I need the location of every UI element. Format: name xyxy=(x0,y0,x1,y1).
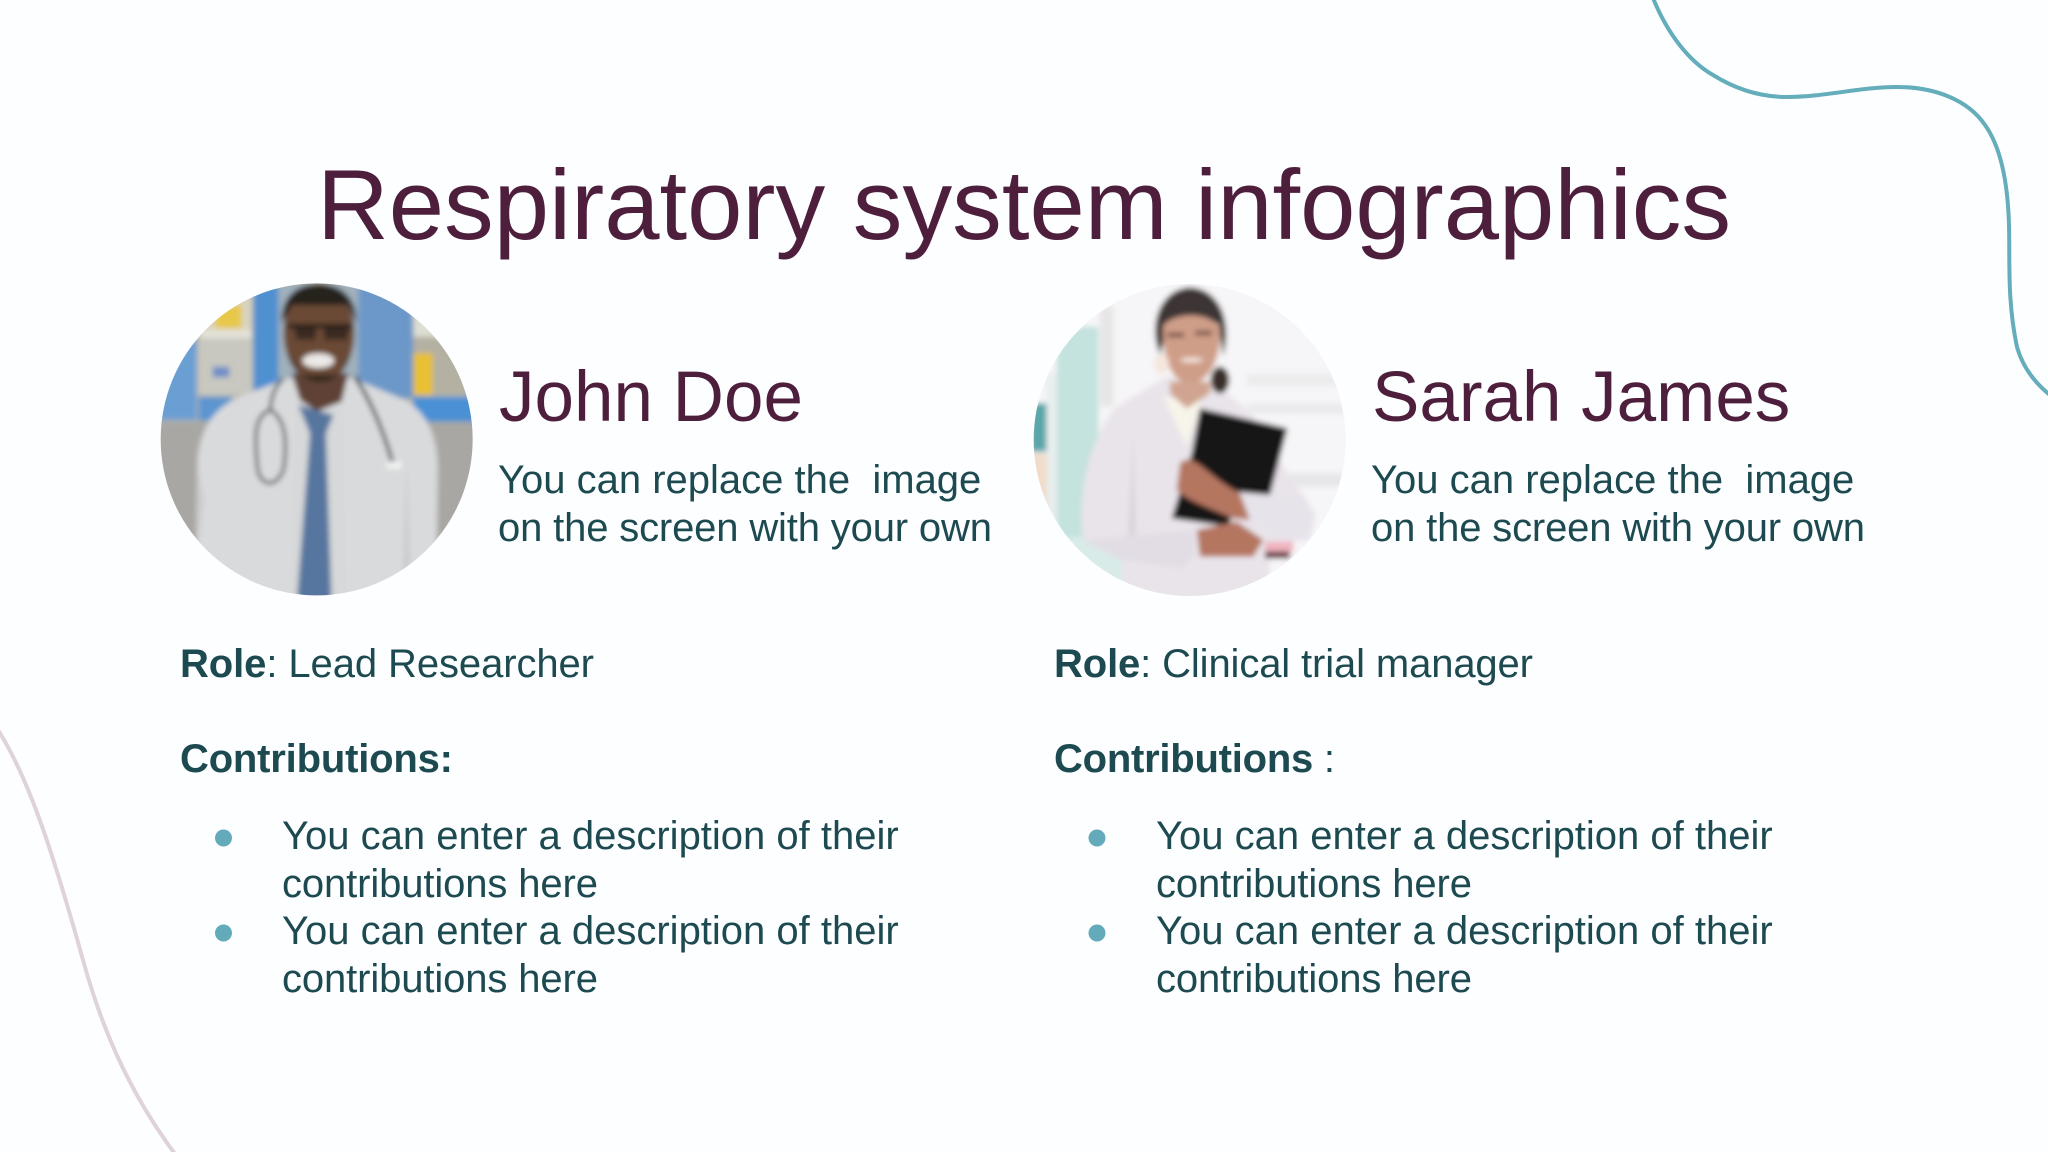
coat xyxy=(197,378,438,607)
contributions list: contributions here xyxy=(1156,957,1472,1001)
tie xyxy=(297,405,333,603)
contributions list: contributions here xyxy=(282,957,598,1001)
hair xyxy=(1155,287,1226,357)
contributions list: You can enter a description of their xyxy=(282,814,899,858)
contributions list: contributions here xyxy=(282,862,598,906)
neck xyxy=(292,373,348,412)
shirt xyxy=(290,403,347,607)
hands and arms xyxy=(1177,460,1250,520)
description: on the screen with your own xyxy=(1371,506,1865,550)
contributions list: You can enter a description of their xyxy=(1156,814,1773,858)
decorative curve: top right xyxy=(1653,0,2048,395)
contributions list xyxy=(1088,814,1773,1001)
name: Sarah James xyxy=(1372,358,1790,437)
contributions list: You can enter a description of their xyxy=(1156,909,1773,953)
role: Role: Clinical trial manager xyxy=(1054,642,1533,686)
stethoscope xyxy=(256,378,285,483)
panel: Sarah James xyxy=(1027,277,1865,1001)
contributions list xyxy=(215,814,899,1001)
contributions list: You can enter a description of their xyxy=(282,909,899,953)
description: You can replace the image xyxy=(498,458,981,502)
decorative curve: bottom left xyxy=(0,730,175,1152)
description xyxy=(498,458,992,550)
role: Role: Lead Researcher xyxy=(180,642,594,686)
description xyxy=(1371,458,1865,550)
panel: John Doe xyxy=(150,270,992,1001)
contributions heading: Contributions : xyxy=(1054,737,1335,781)
coat xyxy=(1080,378,1300,596)
title: Respiratory system infographics xyxy=(317,150,1731,261)
photo: Sarah James xyxy=(1034,284,1346,596)
contributions list: contributions here xyxy=(1156,862,1472,906)
clipboard xyxy=(1172,408,1287,527)
description: You can replace the image xyxy=(1371,458,1854,502)
face xyxy=(1163,315,1220,383)
photo: John Doe xyxy=(160,283,473,596)
contributions heading: Contributions: xyxy=(180,737,453,781)
head xyxy=(284,283,354,383)
name: John Doe xyxy=(499,358,803,437)
description: on the screen with your own xyxy=(498,506,992,550)
